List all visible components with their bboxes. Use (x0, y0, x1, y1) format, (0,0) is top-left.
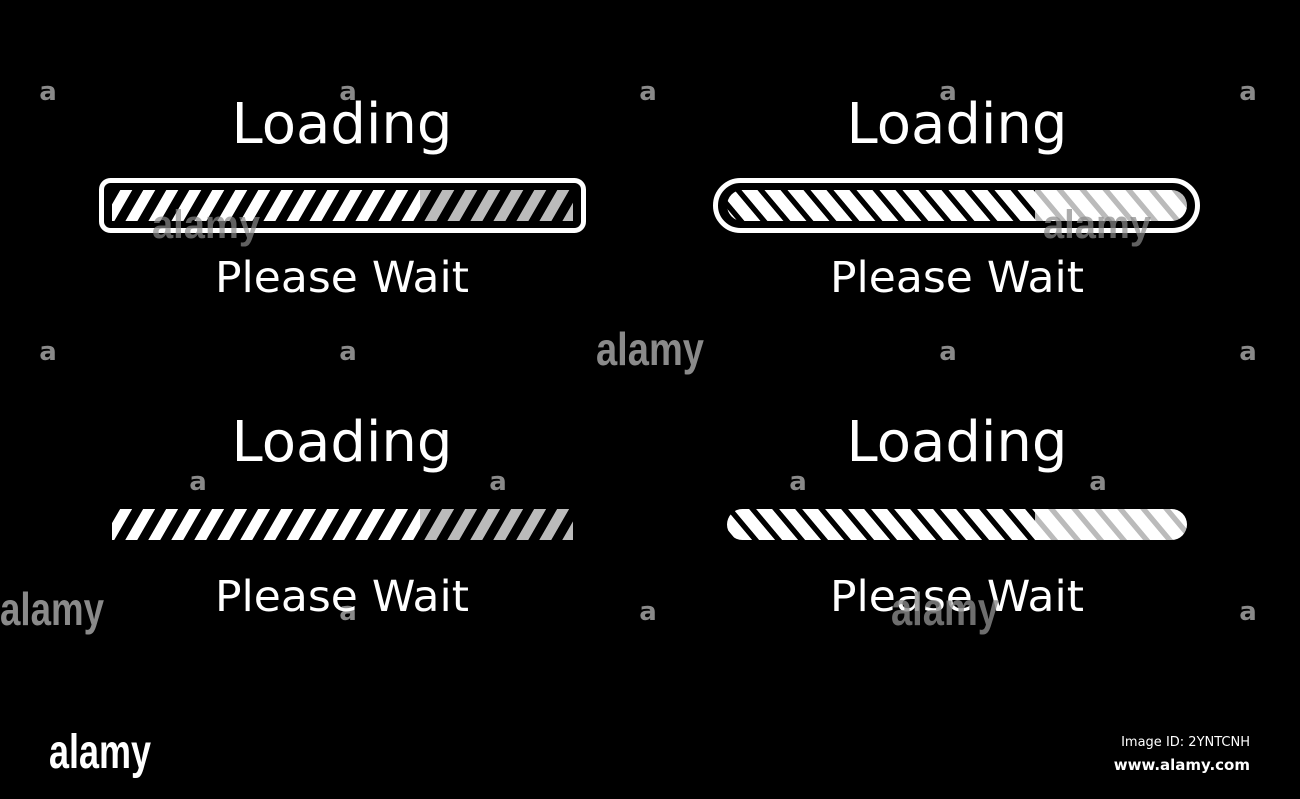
label: please wait top-right: Please Wait (830, 253, 1084, 303)
label: please wait bottom-right: Please Wait (830, 572, 1084, 622)
label: please wait top-left: Please Wait (215, 253, 469, 303)
watermark: small a marks: a (939, 77, 957, 107)
watermark: alamy center: alamy (596, 323, 704, 375)
watermark: small a marks: a (1239, 337, 1257, 367)
watermark: alamy right: alamy (891, 583, 999, 635)
progress bar 4: plain rounded (727, 509, 1187, 540)
watermark: small a marks: a (1089, 467, 1107, 497)
watermark: small a marks: a (1239, 77, 1257, 107)
heading: loading top-right: Loading (847, 92, 1067, 157)
label: please wait bottom-left: Please Wait (215, 572, 469, 622)
logo: alamy: alamy (49, 726, 151, 779)
watermark: alamy left: alamy (0, 583, 104, 635)
heading: loading top-left: Loading (232, 92, 452, 157)
watermark: small a marks: a (39, 77, 57, 107)
watermark: small a marks: a (939, 337, 957, 367)
progress bar 2: outlined rounded (716, 180, 1198, 230)
watermark: small a marks: a (639, 77, 657, 107)
progress bar 3: plain square (112, 509, 573, 540)
watermark: alamy over bar 1: alamy (152, 203, 261, 247)
text: website: www.alamy.com (1114, 756, 1250, 774)
watermark: small a marks: a (189, 467, 207, 497)
watermark: small a marks: a (39, 337, 57, 367)
heading: loading bottom-right: Loading (847, 410, 1067, 475)
watermark: small a marks: a (339, 77, 357, 107)
watermark: small a marks: a (789, 467, 807, 497)
watermark: alamy over bar 2: alamy (1043, 203, 1152, 247)
watermark: small a marks: a (339, 337, 357, 367)
watermark: small a marks (39, 77, 1257, 627)
watermark: small a marks: a (1239, 597, 1257, 627)
watermark: small a marks: a (489, 467, 507, 497)
watermark: small a marks: a (339, 597, 357, 627)
text: image id: Image ID: 2YNTCNH (1121, 735, 1250, 750)
heading: loading bottom-left: Loading (232, 410, 452, 475)
watermark: small a marks: a (639, 597, 657, 627)
progress bar 1: outlined square (102, 180, 584, 230)
